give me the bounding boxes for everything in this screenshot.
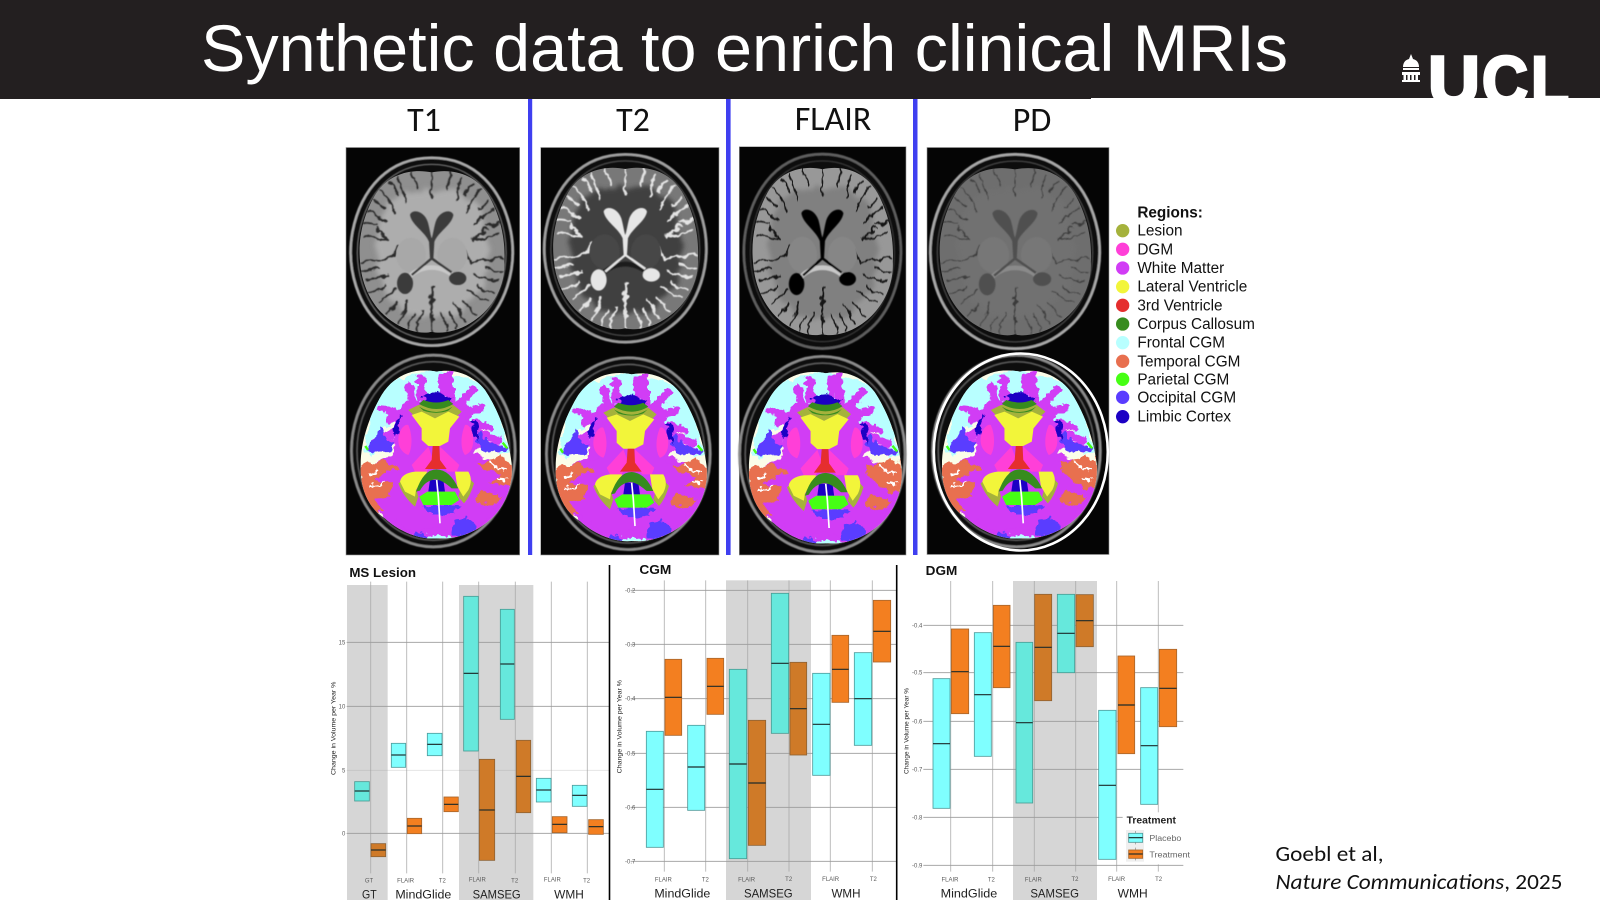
x axis labels — [654, 877, 877, 900]
legend item: DGM — [1116, 241, 1173, 258]
key: treatment: Treatment — [1149, 850, 1191, 860]
logo wordmark: C — [1482, 42, 1528, 120]
heading: FLAIR: FLAIR — [795, 99, 871, 140]
legend item: DGM: DGM — [1137, 241, 1173, 258]
box plots — [355, 596, 603, 860]
box plots — [933, 594, 1177, 859]
x axis labels: FLAIR — [822, 877, 840, 883]
x axis labels: FLAIR — [738, 878, 756, 884]
citation — [1276, 841, 1562, 895]
x axis labels: T2 — [439, 878, 446, 884]
logo wordmark — [1428, 42, 1569, 120]
x axis labels: T2 — [1072, 877, 1079, 883]
x axis labels: T2 — [511, 878, 519, 884]
heading: T1: T1 — [407, 100, 441, 141]
x axis labels: T2 — [583, 878, 591, 884]
panel separators — [528, 99, 918, 555]
key: placebo: Placebo — [1149, 833, 1182, 843]
x axis labels: T2 — [1155, 877, 1163, 883]
UCL logo — [1402, 42, 1569, 120]
y axis: -0.5 — [625, 751, 636, 757]
x axis labels: FLAIR — [397, 878, 415, 884]
FLAIR segmentation — [739, 356, 910, 552]
x axis labels — [941, 877, 1163, 900]
y axis: -0.5 — [912, 671, 923, 677]
legend: treatment: Treatment — [1127, 815, 1177, 826]
chart title: CGM — [639, 562, 671, 577]
legend item: Lesion — [1116, 223, 1183, 240]
legend item: Frontal CGM: Frontal CGM — [1137, 335, 1225, 352]
y axis: 10 — [339, 704, 346, 710]
citation: Nature Communications , 2025 — [1276, 869, 1562, 895]
chart dividers — [610, 565, 897, 900]
y axis — [330, 640, 346, 837]
y axis: Change in Volume per Year % — [617, 680, 624, 773]
legend item: Occipital CGM: Occipital CGM — [1137, 389, 1236, 406]
y axis — [617, 588, 636, 865]
panel: T2 — [541, 100, 719, 555]
PD segmentation — [932, 355, 1105, 547]
legend item: 3rd Ventricle: 3rd Ventricle — [1137, 297, 1223, 314]
y axis — [903, 623, 923, 869]
legend: treatment — [1123, 812, 1193, 864]
legend item: Lateral Ventricle: Lateral Ventricle — [1137, 279, 1247, 296]
y axis: 5 — [342, 768, 346, 774]
FLAIR MRI slice — [744, 154, 901, 349]
chart: MS Lesion — [330, 565, 609, 900]
y axis: -0.4 — [625, 697, 636, 703]
y axis: -0.7 — [912, 767, 923, 773]
x axis labels: FLAIR — [942, 878, 959, 884]
x axis labels: FLAIR — [469, 878, 486, 884]
y axis: -0.8 — [912, 815, 923, 821]
T2 MRI slice — [544, 154, 706, 342]
heading: PD: PD — [1013, 100, 1051, 141]
chart title: DGM — [926, 563, 957, 578]
x axis labels: FLAIR — [655, 878, 672, 884]
chart: DGM — [903, 563, 1193, 900]
citation: Goebl et al, — [1276, 841, 1384, 867]
heading: T2: T2 — [616, 100, 650, 141]
scan background — [927, 148, 1109, 554]
logo wordmark: U — [1428, 42, 1480, 120]
x axis labels: FLAIR — [1108, 877, 1126, 883]
chart title: MS Lesion — [349, 565, 416, 580]
y axis: -0.7 — [625, 859, 636, 865]
y axis: -0.6 — [912, 719, 923, 725]
x axis labels: T2 — [988, 878, 995, 884]
legend item: Limbic Cortex: Limbic Cortex — [1137, 409, 1231, 426]
PD skull ring — [934, 354, 1108, 550]
legend item: Corpus Callosum: Corpus Callosum — [1137, 316, 1255, 333]
x axis labels: T2 — [785, 877, 793, 883]
panel: FLAIR — [739, 99, 910, 555]
T1 segmentation — [351, 355, 520, 547]
scan background — [739, 147, 906, 555]
y axis: -0.6 — [625, 805, 636, 811]
y axis: Change in Volume per Year % — [330, 682, 337, 775]
T2 segmentation — [546, 358, 715, 550]
y axis: Change in Volume per Year % — [903, 688, 910, 774]
y axis: -0.3 — [625, 642, 636, 648]
box plots — [646, 593, 891, 859]
logo wordmark: L — [1531, 42, 1569, 120]
legend item: Lesion: Lesion — [1137, 223, 1183, 240]
chart: CGM — [617, 562, 896, 900]
panel: T1 — [346, 100, 520, 555]
y axis: 0 — [342, 831, 346, 837]
x axis labels — [362, 878, 591, 900]
x axis labels: FLAIR — [544, 878, 561, 884]
x axis labels: GT — [365, 878, 373, 884]
scan background — [541, 148, 719, 555]
x axis labels: T2 — [870, 877, 877, 883]
legend item: Parietal CGM: Parietal CGM — [1137, 371, 1229, 388]
PD MRI slice — [930, 154, 1100, 349]
legend: regions — [1116, 204, 1255, 426]
header bar — [0, 0, 1600, 99]
panel: PD — [927, 100, 1109, 554]
T1 MRI slice — [351, 158, 513, 346]
icon: UCL portico — [1402, 54, 1420, 82]
legend heading: Regions: — [1137, 204, 1203, 221]
y axis: 15 — [339, 640, 346, 646]
y axis: -0.4 — [912, 623, 923, 629]
y axis: -0.9 — [912, 863, 923, 869]
scan background — [346, 148, 520, 555]
y axis: -0.2 — [625, 588, 636, 594]
legend item: White Matter: White Matter — [1137, 260, 1224, 277]
title: Synthetic data to enrich clinical MRIs — [201, 11, 1288, 85]
x axis labels: T2 — [702, 878, 709, 884]
legend item: Temporal CGM: Temporal CGM — [1137, 353, 1240, 370]
x axis labels: FLAIR — [1025, 878, 1042, 884]
